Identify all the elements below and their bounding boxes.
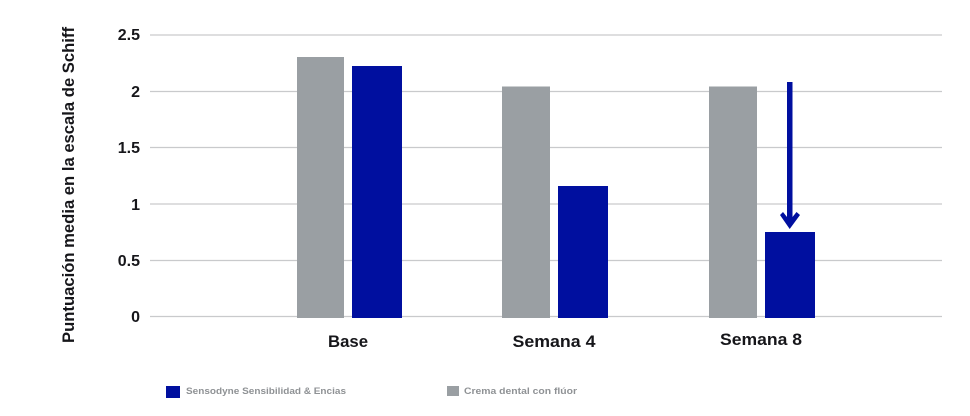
group: Base bars <box>297 57 402 318</box>
legend: Sensodyne: Sensodyne Sensibilidad & Encias <box>186 386 346 397</box>
y-axis title: Puntuación media en la escala de Schiff <box>59 27 78 343</box>
x-axis labels: Semana 8 <box>720 330 802 349</box>
y-axis tick labels: 1.5 <box>118 140 140 157</box>
y-axis tick labels: 1 <box>131 197 140 214</box>
arrow: decrease at week 8 <box>780 82 800 229</box>
group: Semana 4 bars <box>502 86 608 318</box>
y-axis tick labels: 0 <box>131 309 140 326</box>
legend: fluoride toothpaste: Crema dental con flúor <box>464 386 577 397</box>
x-axis labels: Base <box>328 332 368 351</box>
y-axis tick labels <box>118 27 140 326</box>
y-axis tick labels: 2 <box>131 84 140 101</box>
x-axis labels <box>328 330 802 351</box>
y-axis tick labels: 2.5 <box>118 27 140 44</box>
x-axis labels: Semana 4 <box>512 332 596 351</box>
group: Semana 8 bars <box>709 86 815 318</box>
y-axis tick labels: 0.5 <box>118 253 140 270</box>
